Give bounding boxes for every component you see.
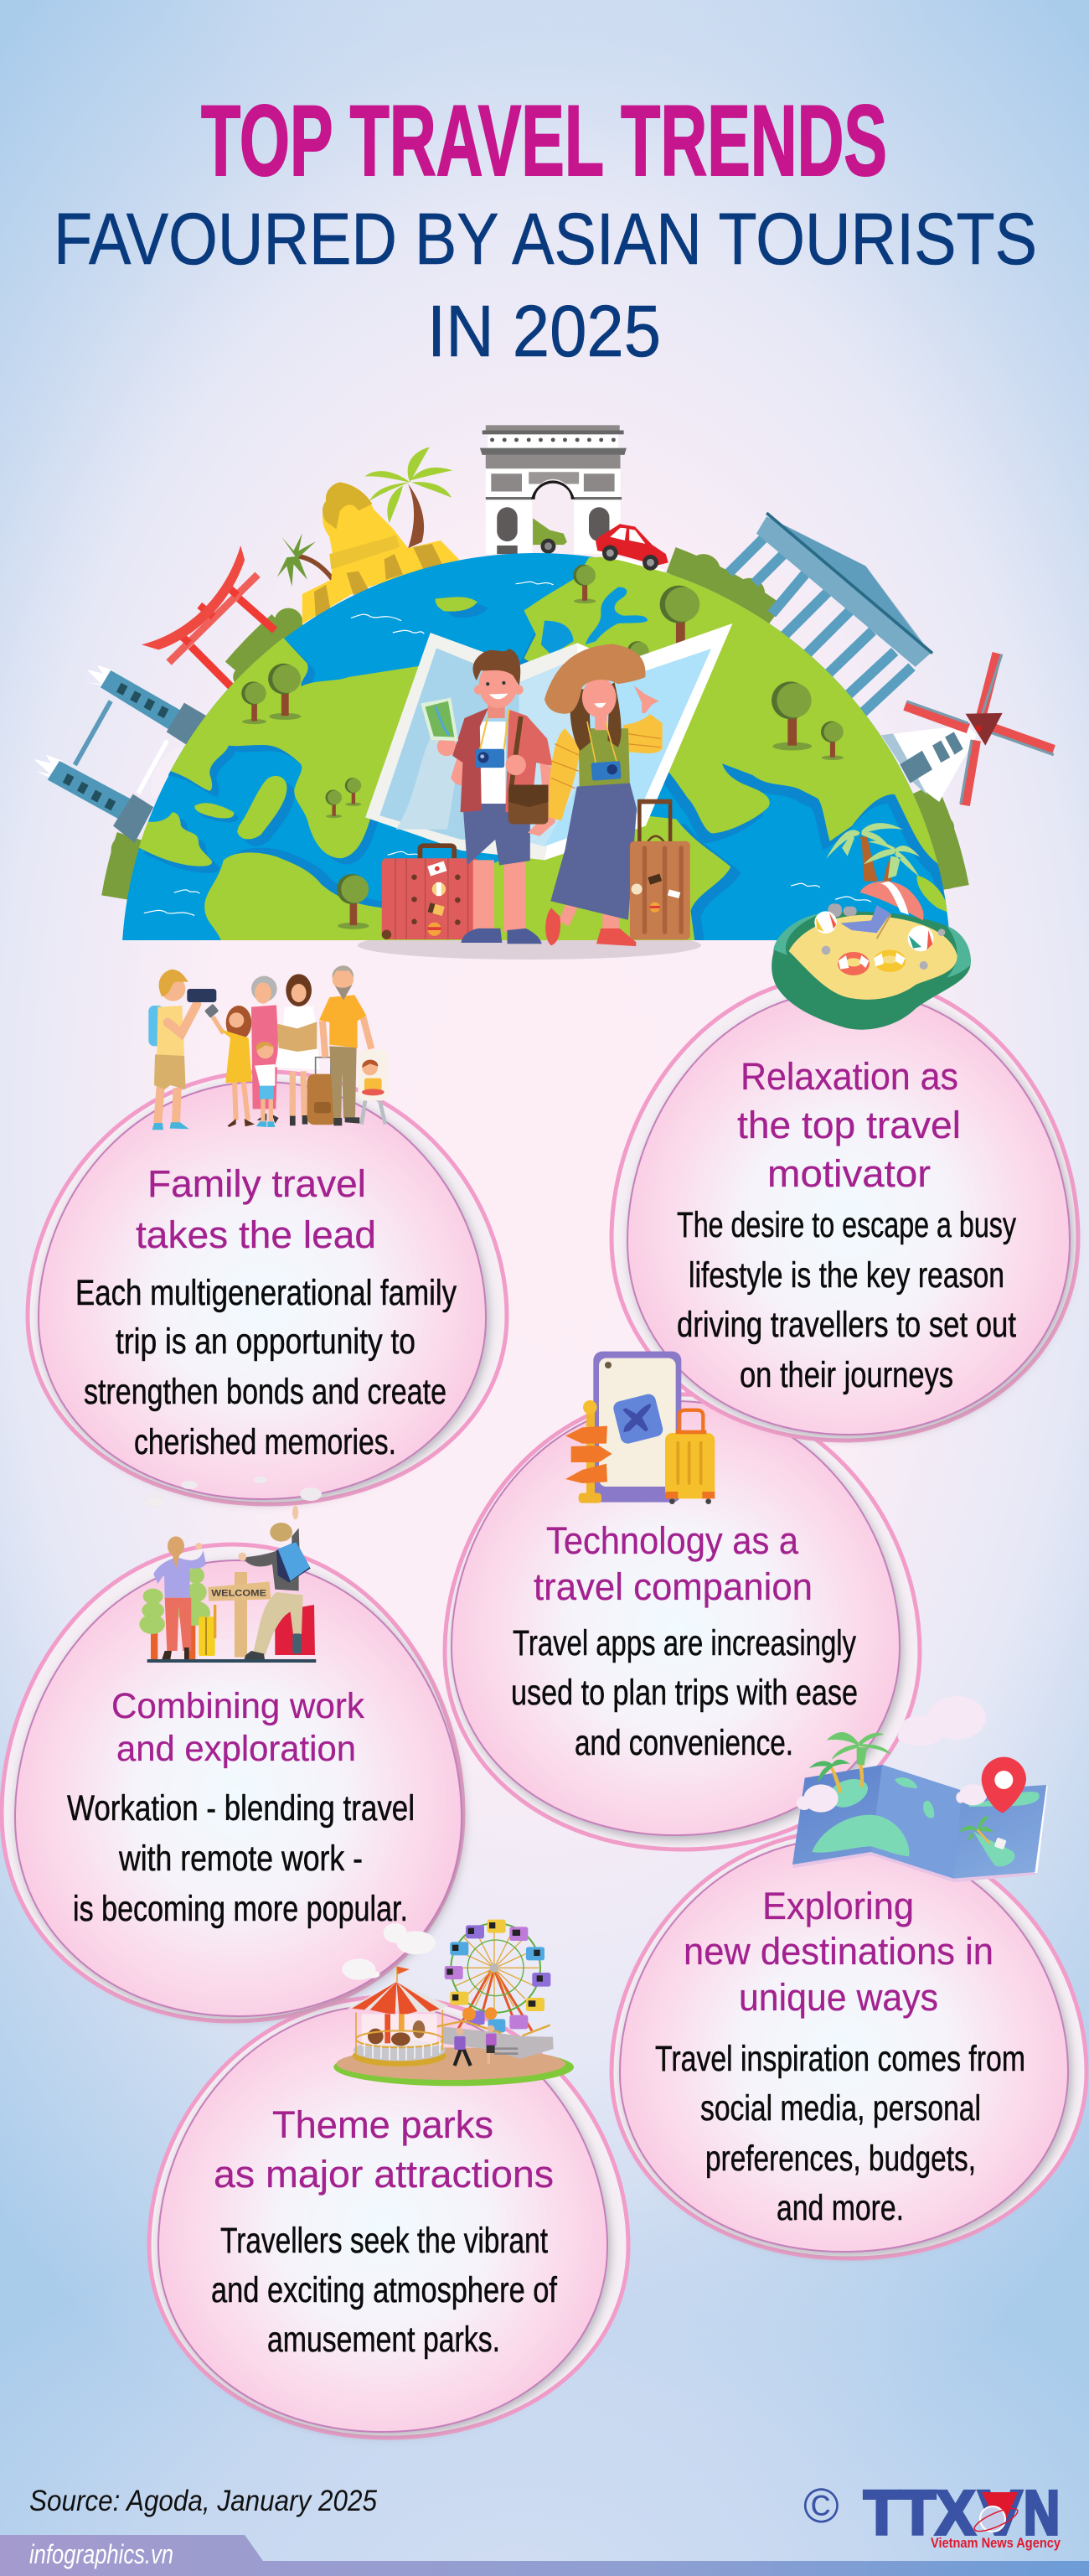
- heading: [111, 1686, 364, 1769]
- ride deck: [437, 2021, 554, 2059]
- heading: Family travel: [147, 1162, 366, 1205]
- footer bar: [0, 2535, 1089, 2576]
- heading: the top travel: [737, 1104, 961, 1146]
- logo: TTXVN Vietnam News Agency: TTX: [864, 2478, 975, 2548]
- footer bar: infographics.vn: [29, 2539, 173, 2569]
- body text: and more.: [777, 2188, 904, 2228]
- illustration: tourists, map and luggage: [365, 623, 732, 946]
- body text: Each multigenerational family: [75, 1273, 457, 1313]
- land masses: [119, 549, 988, 942]
- children: [454, 2025, 497, 2066]
- body text: trip is an opportunity to: [116, 1322, 415, 1362]
- illustration: globe: [122, 553, 948, 940]
- icon: family group: [148, 965, 388, 1130]
- heading: Exploring: [762, 1885, 914, 1927]
- body text: [511, 1623, 858, 1763]
- trees: [139, 1567, 210, 1659]
- woman: [544, 644, 690, 946]
- heading: as major attractions: [214, 2153, 554, 2196]
- body text: with remote work -: [118, 1839, 363, 1879]
- heading: Combining work: [111, 1686, 364, 1726]
- body text: on their journeys: [740, 1355, 953, 1395]
- body text: amusement parks.: [267, 2320, 500, 2360]
- heading: and exploration: [116, 1729, 356, 1769]
- heading: new destinations in: [684, 1930, 994, 1973]
- logo: TTXVN Vietnam News Agency: [803, 2478, 1061, 2551]
- body text: cherished memories.: [134, 1422, 396, 1462]
- icon: windmill: [881, 653, 1054, 805]
- heading: [214, 2103, 554, 2196]
- clouds on map: [797, 1784, 987, 1813]
- body text: Travel apps are increasingly: [513, 1623, 856, 1663]
- carousel: [348, 1967, 448, 2066]
- icon: small clouds under family panel: [144, 1477, 322, 1508]
- heading: Relaxation as: [741, 1055, 958, 1098]
- heading: travel companion: [534, 1565, 813, 1608]
- ocean shade: [126, 558, 982, 948]
- ground shadow: [358, 931, 701, 960]
- body text: used to plan trips with ease: [511, 1673, 858, 1713]
- icon: red car: [596, 524, 668, 572]
- ferris wheel: [445, 1920, 550, 2032]
- icon: phone, signpost and suitcase: [565, 1352, 715, 1504]
- illustration: landmarks around the globe: [34, 425, 1054, 898]
- platform: [333, 2047, 574, 2086]
- body text: is becoming more popular.: [73, 1889, 408, 1929]
- heading: [684, 1885, 994, 2019]
- heading: [737, 1055, 961, 1195]
- yellow suitcase: [199, 1605, 216, 1656]
- logo: TTXVN Vietnam News Agency: N: [1024, 2478, 1060, 2548]
- body text: [75, 1273, 457, 1462]
- baby stroller: [358, 1050, 388, 1125]
- bushes: [109, 554, 961, 898]
- icon: green car: [533, 518, 567, 554]
- red suitcase: [382, 846, 479, 939]
- body text: Travellers seek the vibrant: [220, 2221, 548, 2261]
- icon: Arc de Triomphe: [480, 425, 627, 556]
- man: [238, 1506, 315, 1659]
- logo: TTXVN Vietnam News Agency: V: [978, 2478, 1022, 2548]
- heading: Technology as a: [546, 1519, 799, 1562]
- body text: driving travellers to set out: [677, 1305, 1016, 1345]
- body text: Workation - blending travel: [67, 1788, 415, 1829]
- icon: Tower Bridge: [34, 665, 208, 843]
- grandfather: [319, 965, 371, 1125]
- body text: and convenience.: [575, 1723, 793, 1763]
- WELCOME sign: WELCOME: [211, 1588, 266, 1598]
- icon: torii gate: [142, 546, 275, 689]
- WELCOME sign: [208, 1572, 271, 1658]
- body text: [211, 2221, 558, 2360]
- woman: [153, 1536, 206, 1659]
- logo: TTXVN Vietnam News Agency: ©: [803, 2479, 839, 2533]
- illustration: cars: [596, 524, 668, 572]
- heading: [136, 1162, 376, 1256]
- icon: Greek temple: [729, 513, 932, 713]
- unfolded map: [365, 623, 732, 860]
- icon: sphinx and palms: [277, 447, 459, 624]
- trees: [241, 565, 844, 929]
- girl: [204, 1004, 255, 1127]
- green islands: [812, 1777, 1040, 1866]
- photographer: [148, 970, 216, 1130]
- body text: [677, 1205, 1016, 1395]
- icon: travellers at welcome sign: [139, 1498, 316, 1663]
- heading: takes the lead: [136, 1213, 376, 1256]
- body text: social media, personal: [700, 2088, 981, 2129]
- title: [54, 85, 1037, 372]
- icon: beach island: [772, 823, 971, 1030]
- panel: combining work and exploration: [2, 1544, 464, 2021]
- body text: and exciting atmosphere of: [211, 2270, 558, 2310]
- body text: strengthen bonds and create: [84, 1372, 446, 1412]
- clouds: [342, 1923, 436, 1980]
- panel: technology as a travel companion: [445, 1394, 920, 1849]
- clouds: [898, 1696, 986, 1746]
- heading: unique ways: [739, 1976, 938, 2019]
- panel: exploring new destinations in unique ways: [612, 1830, 1086, 2258]
- boy: [255, 1042, 275, 1127]
- body text: [655, 2039, 1025, 2228]
- bush bands behind globe: [115, 560, 956, 897]
- brown suitcase: [630, 799, 690, 939]
- suitcase: [307, 1058, 338, 1125]
- title: IN 2025: [427, 291, 661, 372]
- panel: theme parks as major attractions: [149, 1997, 628, 2438]
- body text: lifestyle is the key reason: [689, 1255, 1004, 1296]
- icon: amusement park: [333, 1920, 574, 2086]
- body text: [67, 1788, 415, 1929]
- waves: [144, 582, 871, 915]
- panel: family travel takes the lead: [28, 1072, 507, 1504]
- grandmother: [251, 976, 279, 1124]
- body text: preferences, budgets,: [705, 2139, 976, 2179]
- heading: [534, 1519, 813, 1608]
- man: [421, 649, 555, 944]
- heading: Theme parks: [272, 2103, 493, 2146]
- heading: motivator: [767, 1152, 931, 1195]
- inland water: [541, 587, 648, 655]
- location pin: [982, 1757, 1026, 1813]
- logo: TTXVN Vietnam News Agency: Vietnam News Agency: [931, 2535, 1061, 2551]
- icon: folded map with pin: [792, 1696, 1048, 1882]
- panel: relaxation as the top travel motivator: [612, 975, 1078, 1441]
- mother: [275, 974, 320, 1125]
- palms: [809, 1732, 994, 1844]
- source: Source: Agoda, January 2025: [29, 2485, 377, 2517]
